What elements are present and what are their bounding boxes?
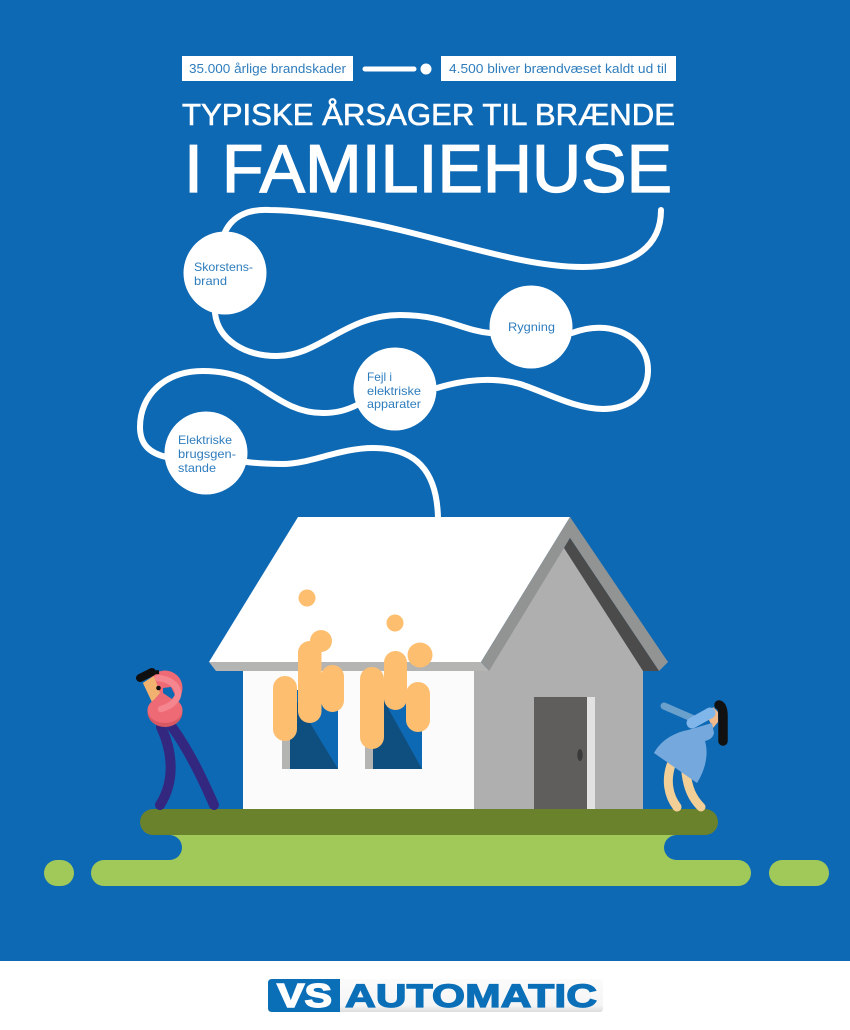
man torso highlight: [148, 697, 182, 723]
cause: Elektriske brugsgenstande: Elektriske: [178, 433, 232, 447]
light green lawn: [91, 835, 751, 886]
man face over ring: [143, 676, 160, 702]
cause: Fejl i elektriske apparater: elektriske: [367, 384, 421, 398]
woman hair: [719, 705, 723, 741]
man hair: [140, 672, 152, 678]
smoke trail: [140, 210, 661, 518]
cause: Fejl i elektriske apparater: apparater: [367, 397, 421, 411]
woman front arm: [692, 713, 710, 723]
title: [182, 97, 675, 207]
flames left: [273, 590, 344, 741]
right lawn pill: [769, 860, 829, 886]
stat box: 35.000 årlige brandskader: 35.000 årlige brandskader: [189, 61, 347, 76]
cause: Fejl i elektriske apparater: [354, 348, 436, 430]
flames right: [360, 614, 432, 749]
cause: Elektriske brugsgenstande: [164, 412, 248, 494]
man arm: [158, 678, 178, 709]
window left: [282, 690, 338, 769]
man hand gap: [163, 687, 175, 699]
logo blue block: [268, 979, 340, 1012]
title line 1: TYPISKE ÅRSAGER TIL BRÆNDE: [182, 97, 675, 132]
man eye: [156, 686, 161, 690]
house: [209, 517, 668, 809]
man neck and face: [143, 675, 160, 702]
white wall: [243, 668, 474, 809]
left lawn pill: [44, 860, 74, 886]
man in red jumper: [140, 670, 214, 805]
dark green strip: [140, 809, 718, 835]
logo AUTOMATIC: AUTOMATIC: [345, 978, 597, 1014]
logo: VS Automatic: [268, 977, 603, 1014]
roof eave: [209, 662, 489, 671]
woman dress: [654, 723, 714, 783]
dark gable shadow: [564, 538, 659, 671]
man legs: [160, 727, 214, 805]
stats row: [182, 56, 676, 81]
woman face: [708, 707, 718, 728]
door: [534, 697, 595, 809]
cause: Elektriske brugsgenstande: brugsgen-: [178, 447, 236, 461]
white roof: [209, 517, 570, 662]
cause: Skorstensbrand: [184, 232, 266, 314]
window right: [365, 690, 422, 769]
roof edge band: [481, 517, 668, 671]
cause: Rygning: Rygning: [508, 320, 555, 334]
grey gable wall: [474, 546, 643, 809]
stat box: 4.500 bliver brændvæset kaldt ud til: 4.500 bliver brændvæset kaldt ud til: [449, 61, 667, 76]
woman back arm: [664, 706, 694, 719]
cause: Elektriske brugsgenstande: stande: [178, 461, 216, 475]
cause: Skorstensbrand: Skorstens-: [194, 260, 253, 274]
ground: [44, 809, 829, 886]
footer band: [0, 961, 850, 1030]
cause: Skorstensbrand: brand: [194, 274, 227, 288]
woman legs: [668, 765, 701, 807]
title line 2: I FAMILIEHUSE: [184, 131, 672, 207]
connector line and dot: [365, 64, 432, 74]
man lower torso: [148, 697, 182, 727]
logo bar: [268, 979, 603, 1012]
man cap detail: [150, 672, 159, 673]
man upper jumper ring: [148, 670, 182, 706]
woman in blue dress: [654, 705, 723, 807]
cause: Fejl i elektriske apparater: Fejl i: [367, 370, 392, 384]
cause: Rygning: [490, 286, 572, 368]
stat box: 35.000 årlige brandskader: [182, 56, 353, 81]
logo VS: VS: [277, 977, 332, 1014]
stat box: 4.500 bliver brændvæset kaldt ud til: [441, 56, 676, 81]
